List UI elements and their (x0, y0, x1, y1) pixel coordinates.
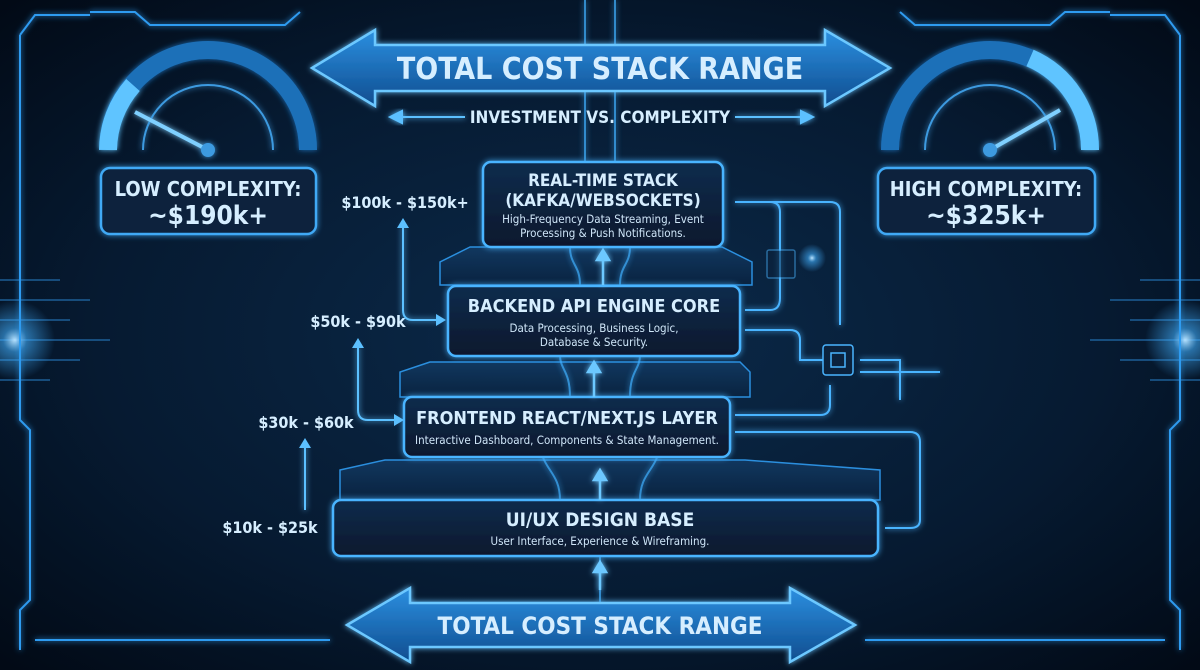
right gauge (890, 50, 1090, 157)
right complexity box: ~$325k+ (926, 201, 1046, 231)
left complexity box: ~$190k+ (148, 201, 268, 231)
box: real-time stack: (KAFKA/WEBSOCKETS) (505, 191, 701, 211)
left complexity box (101, 168, 316, 234)
left complexity box: LOW COMPLEXITY: (115, 177, 301, 201)
box: frontend (404, 397, 730, 457)
box: frontend: FRONTEND REACT/NEXT.JS LAYER (416, 408, 718, 429)
side circuit lines (0, 280, 1200, 380)
box: ui/ux: User Interface, Experience & Wireframing. (491, 534, 709, 548)
vertical arrows between layers (588, 250, 609, 590)
bottom arrow (347, 588, 855, 662)
box: backend: BACKEND API ENGINE CORE (468, 296, 720, 317)
platform slabs (340, 247, 880, 500)
subtitle arrow: INVESTMENT VS. COMPLEXITY (470, 108, 731, 128)
central flow lines (540, 0, 660, 630)
chip icons (767, 250, 853, 375)
title arrow: TOTAL COST STACK RANGE (397, 52, 803, 87)
left gauge (108, 50, 308, 157)
right complexity box: HIGH COMPLEXITY: (890, 177, 1082, 201)
cost labels with arrows: $30k - $60k (258, 413, 354, 432)
box: ui/ux: UI/UX DESIGN BASE (506, 509, 694, 531)
box: backend: Data Processing, Business Logic, (510, 321, 678, 335)
cost labels with arrows: $50k - $90k (310, 312, 406, 331)
box: backend (448, 286, 740, 356)
box: real-time stack (483, 162, 723, 247)
cost labels with arrows: $100k - $150k+ (341, 193, 469, 212)
box: backend: Database & Security. (540, 335, 648, 349)
box: frontend: Interactive Dashboard, Components & State Management. (415, 433, 719, 447)
cost labels with arrows (222, 193, 469, 537)
right complexity box (878, 168, 1095, 234)
cost labels with arrows: $10k - $25k (222, 518, 318, 537)
title arrow (312, 30, 890, 106)
box: real-time stack: Processing & Push Notifications. (520, 226, 686, 240)
box: ui/ux (333, 500, 878, 556)
box: real-time stack: High-Frequency Data Streaming, Event (502, 212, 704, 226)
subtitle arrow (390, 108, 813, 128)
bottom arrow: TOTAL COST STACK RANGE (437, 612, 763, 640)
box: real-time stack: REAL-TIME STACK (528, 171, 679, 191)
right circuit connectors (735, 202, 940, 528)
